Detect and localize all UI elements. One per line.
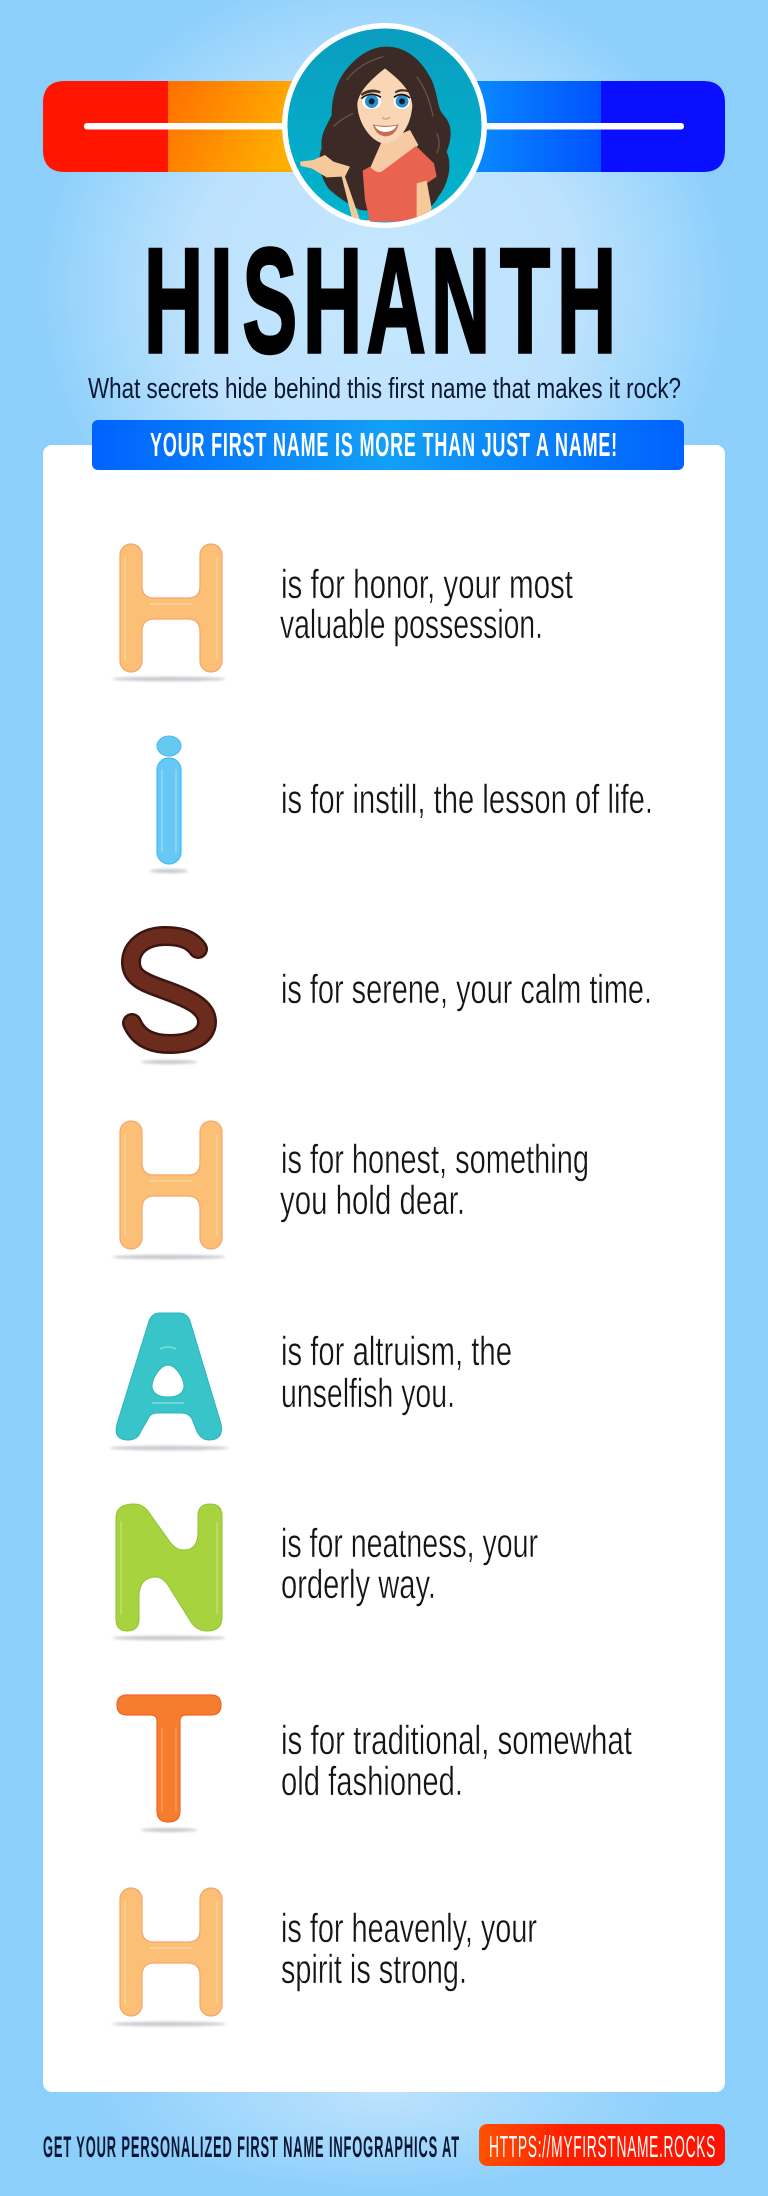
text: heavenly: is for heavenly, your	[281, 1905, 537, 1951]
header ribbon	[43, 81, 725, 172]
text: traditional: old fashioned.	[281, 1758, 463, 1804]
row: T traditional	[117, 1695, 632, 1832]
text: honest: you hold dear.	[280, 1177, 465, 1223]
text: honor	[280, 561, 573, 647]
text: traditional: is for traditional, somewhat	[281, 1717, 632, 1763]
text: neatness	[281, 1520, 538, 1607]
row: A altruism	[109, 1313, 512, 1450]
icon: letter S	[131, 936, 207, 1064]
portrait: cartoon woman in circle	[282, 23, 487, 228]
row: I instill	[150, 736, 653, 873]
title: HISHANTH	[144, 218, 616, 384]
banner	[92, 420, 684, 470]
icon: letter i	[150, 736, 188, 873]
row: S serene	[131, 936, 652, 1064]
icon: letter H	[112, 1888, 226, 2026]
text: neatness: orderly way.	[281, 1561, 436, 1607]
icon: letter H	[112, 1121, 226, 1259]
text: heavenly: spirit is strong.	[281, 1946, 467, 1992]
icon: letter T	[117, 1695, 221, 1832]
text: honest	[280, 1136, 589, 1223]
text: neatness: is for neatness, your	[281, 1520, 538, 1566]
text: honest: is for honest, something	[281, 1136, 589, 1182]
text: altruism: unselfish you.	[281, 1370, 455, 1416]
text: altruism: is for altruism, the	[281, 1328, 512, 1374]
footer url button	[479, 2124, 725, 2166]
row: H honest	[112, 1121, 589, 1259]
icon: letter H	[112, 544, 226, 681]
white content panel	[43, 445, 725, 2092]
text: honor: valuable possession.	[280, 601, 543, 647]
row: N neatness	[112, 1504, 538, 1640]
text: honor: is for honor, your most	[281, 561, 573, 607]
text: altruism	[281, 1328, 512, 1416]
icon: letter N	[112, 1504, 226, 1640]
row: H heavenly	[112, 1888, 537, 2026]
icon: letter A	[109, 1313, 229, 1450]
row: H honor	[112, 544, 573, 681]
text: heavenly	[281, 1905, 537, 1992]
text: traditional	[281, 1717, 632, 1804]
